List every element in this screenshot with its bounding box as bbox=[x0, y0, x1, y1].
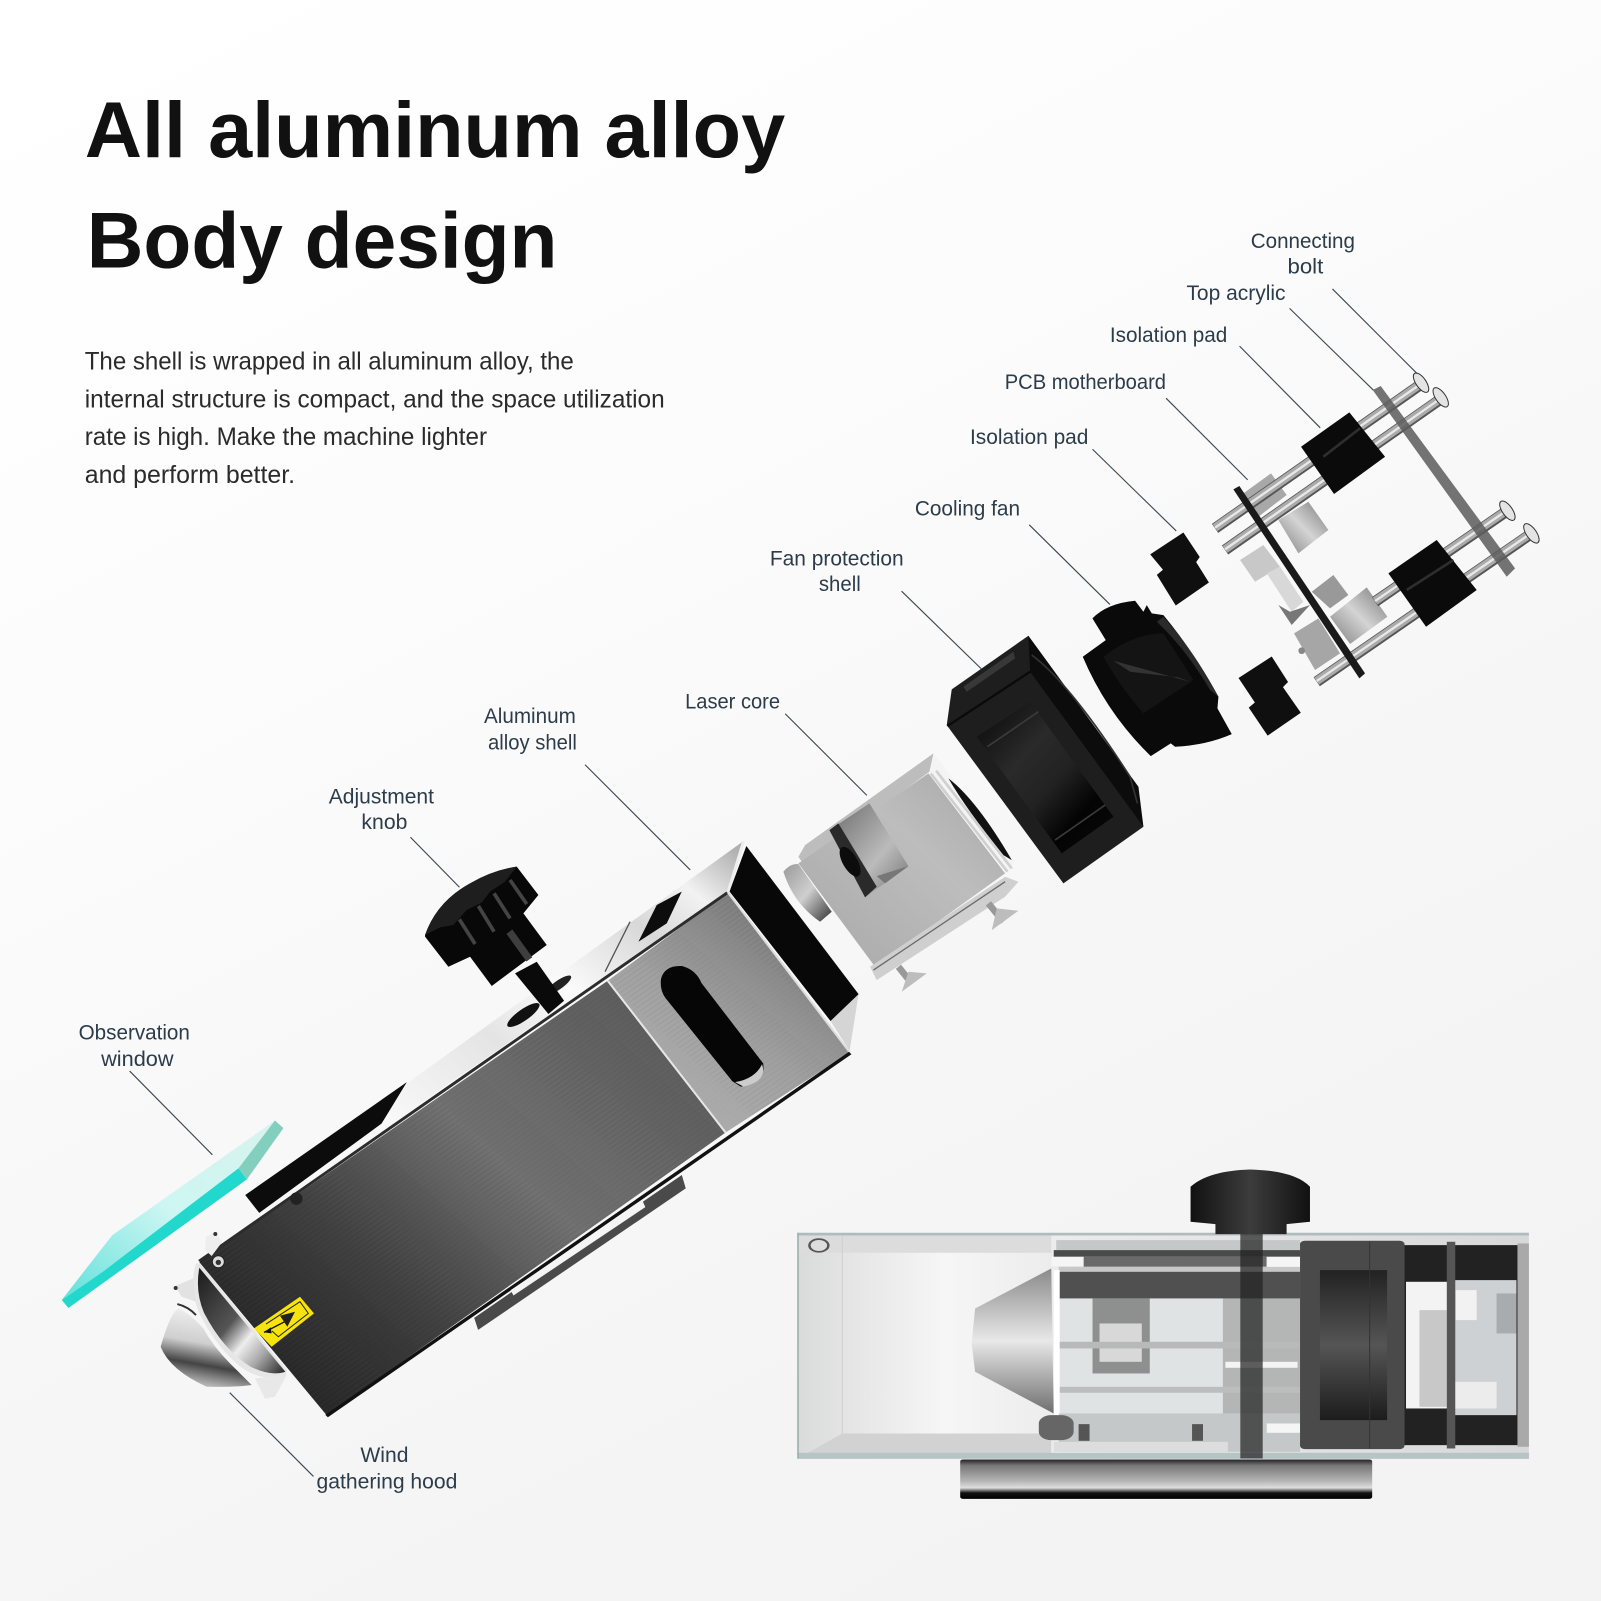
knob stem bbox=[515, 962, 564, 1014]
hood flange bbox=[174, 1232, 287, 1399]
fan block bbox=[1300, 1241, 1405, 1449]
description text bbox=[85, 348, 665, 489]
callout: observation window: Observation bbox=[79, 1021, 190, 1044]
rear black section bbox=[1405, 1242, 1529, 1448]
hood cone bbox=[161, 1308, 252, 1387]
front nub cylinder bbox=[783, 864, 832, 922]
screws bbox=[898, 903, 1018, 992]
callout: wind gathering hood: gathering hood bbox=[317, 1471, 457, 1494]
knob and top-face details bbox=[425, 867, 682, 1031]
callout: aluminum alloy shell: Aluminum bbox=[484, 705, 576, 728]
window recess frame bbox=[245, 1082, 407, 1213]
callout: adjustment knob: knob bbox=[361, 811, 407, 834]
description text: internal structure is compact, and the space utilization bbox=[85, 385, 665, 413]
knob bbox=[1191, 1169, 1310, 1234]
callout: wind gathering hood bbox=[230, 1393, 457, 1494]
laser core block bbox=[1054, 1270, 1300, 1417]
silver PCB components bbox=[1240, 473, 1387, 670]
set screw bbox=[809, 1239, 828, 1252]
glass enclosure bbox=[797, 1233, 1529, 1459]
main face bbox=[798, 773, 1005, 967]
isolation pad lower bbox=[1388, 540, 1477, 627]
callout: aluminum alloy shell bbox=[484, 705, 690, 870]
callout: connecting bolt: bolt bbox=[1288, 256, 1323, 279]
callout: connecting bolt bbox=[1251, 230, 1417, 374]
cooling fan bbox=[1083, 601, 1232, 756]
callout: wind gathering hood: Wind bbox=[360, 1444, 408, 1467]
exploded view: main aluminum body bbox=[62, 841, 859, 1416]
callout: cooling fan: Cooling fan bbox=[915, 498, 1020, 521]
callout: observation window: window bbox=[100, 1048, 174, 1071]
nozzle cone bbox=[972, 1268, 1054, 1413]
seam on top face bbox=[605, 922, 630, 972]
laser core bbox=[783, 753, 1018, 992]
hood bowl bbox=[198, 1268, 285, 1373]
description text: The shell is wrapped in all aluminum alloy, the bbox=[85, 348, 574, 376]
shell edge line bbox=[199, 892, 728, 1261]
title: Body design bbox=[87, 197, 557, 285]
title bbox=[85, 86, 785, 285]
title: All aluminum alloy bbox=[85, 86, 785, 174]
callout: connecting bolt: Connecting bbox=[1251, 230, 1355, 253]
lower edge bbox=[327, 1053, 850, 1416]
laser warning sticker bbox=[254, 1297, 314, 1347]
top folded plate bbox=[798, 753, 933, 864]
top face of shell bbox=[286, 841, 744, 1195]
silver rear side with slot bbox=[608, 892, 850, 1133]
callout: isolation pad upper: Isolation pad bbox=[1110, 324, 1227, 347]
callout: aluminum alloy shell: alloy shell bbox=[488, 731, 577, 754]
callout: fan protection shell bbox=[770, 548, 981, 669]
callout: top acrylic: Top acrylic bbox=[1186, 282, 1285, 305]
isolation pad upper bbox=[1301, 412, 1385, 494]
callout: top acrylic bbox=[1186, 282, 1373, 390]
callout: cooling fan bbox=[915, 498, 1110, 604]
isolation pad small upper bbox=[1150, 532, 1209, 605]
window screw bbox=[290, 1192, 302, 1205]
bottom rail bbox=[960, 1459, 1372, 1499]
bottom rail bbox=[870, 877, 1018, 980]
callout: isolation pad lower: Isolation pad bbox=[970, 426, 1088, 449]
lower rails bbox=[1039, 1257, 1302, 1452]
brushed texture bbox=[199, 981, 726, 1415]
fan protection shell bbox=[947, 636, 1143, 883]
callout: isolation pad upper bbox=[1110, 324, 1320, 428]
description text: rate is high. Make the machine lighter bbox=[85, 423, 487, 451]
callout: laser core: Laser core bbox=[685, 691, 780, 714]
callout: adjustment knob bbox=[329, 786, 459, 887]
connecting bolts bbox=[1215, 371, 1542, 682]
callout: adjustment knob: Adjustment bbox=[329, 786, 434, 809]
callout: fan protection shell: Fan protection bbox=[770, 548, 904, 571]
PCB assembly bbox=[1215, 371, 1542, 682]
knob stem bbox=[1240, 1233, 1263, 1458]
knob mounting holes bbox=[504, 973, 573, 1031]
shell screw bbox=[212, 1256, 224, 1268]
observation window glass bbox=[62, 1121, 283, 1308]
callout: PCB motherboard: PCB motherboard bbox=[1005, 371, 1166, 394]
dark brushed side bbox=[199, 981, 726, 1415]
callout: fan protection shell: shell bbox=[819, 573, 861, 596]
rear plate and opening bbox=[929, 753, 1015, 873]
PCB motherboard plate bbox=[1233, 486, 1365, 678]
mounting rail bbox=[474, 1175, 686, 1330]
shell rear opening bbox=[728, 841, 859, 1052]
right edge rails bbox=[931, 771, 1012, 872]
assembled cross-section view bbox=[797, 1169, 1529, 1499]
adjustment knob bbox=[425, 867, 547, 986]
callout: isolation pad lower bbox=[970, 426, 1176, 531]
top port opening bbox=[638, 892, 682, 942]
notch bbox=[829, 803, 908, 897]
upper housing bands bbox=[1054, 1240, 1300, 1298]
callout: PCB motherboard bbox=[1005, 371, 1248, 480]
small isolation pads bbox=[1150, 532, 1301, 736]
top acrylic plate bbox=[1373, 386, 1515, 577]
fan protection shell and cooling fan bbox=[947, 601, 1232, 883]
description text: and perform better. bbox=[85, 461, 295, 489]
wind gathering hood bbox=[161, 1232, 314, 1399]
callout: laser core bbox=[685, 691, 867, 795]
isolation pad small lower bbox=[1239, 657, 1301, 736]
cone dark rim bbox=[177, 1304, 196, 1315]
callout: observation window bbox=[79, 1021, 212, 1155]
